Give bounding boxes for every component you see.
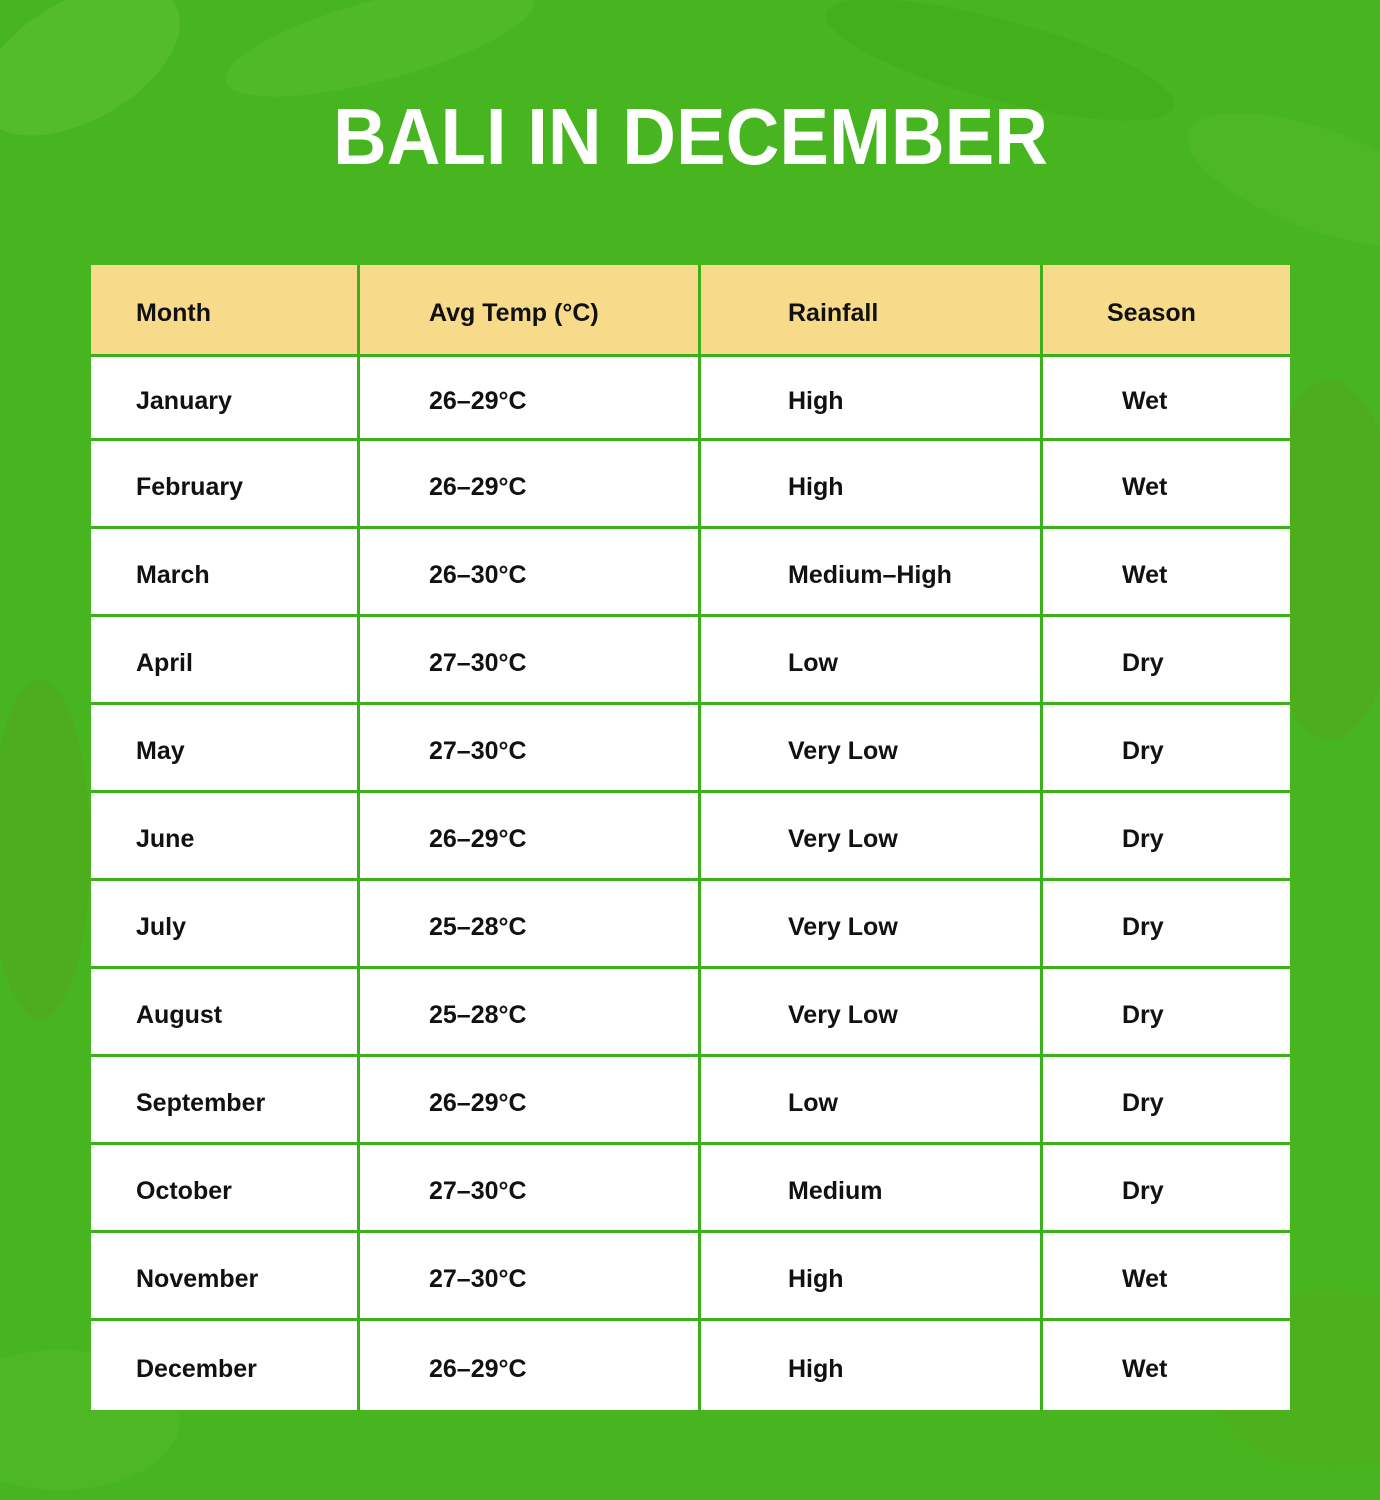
rows: Dry [1122,1001,1164,1029]
rows: November [136,1265,258,1293]
rows: Wet [1122,1265,1167,1293]
rows: Medium–High [788,561,952,589]
rows [91,357,1290,1410]
rows: Dry [1122,913,1164,941]
header row: Rainfall [788,299,878,327]
title: BALI IN DECEMBER [333,92,1048,181]
rows: February [136,473,243,501]
header row: Season [1107,299,1196,327]
rows: Dry [1122,737,1164,765]
rows: Wet [1122,387,1167,415]
rows: 26–29°C [429,825,527,853]
rows: December [136,1355,257,1383]
rows: August [136,1001,222,1029]
rows: 25–28°C [429,913,527,941]
rows: Wet [1122,561,1167,589]
rows: October [136,1177,232,1205]
rows: Dry [1122,825,1164,853]
rows: Very Low [788,737,898,765]
header row: Avg Temp (°C) [429,299,599,327]
rows: Very Low [788,1001,898,1029]
rows: Dry [1122,649,1164,677]
header row [91,265,1290,354]
rows: 25–28°C [429,1001,527,1029]
rows: 26–29°C [429,387,527,415]
rows: 27–30°C [429,1265,527,1293]
rows: March [136,561,210,589]
rows: June [136,825,194,853]
rows: July [136,913,186,941]
rows: Low [788,649,838,677]
rows: 27–30°C [429,649,527,677]
rows: 26–30°C [429,561,527,589]
rows: Dry [1122,1177,1164,1205]
rows: Very Low [788,825,898,853]
rows: 27–30°C [429,1177,527,1205]
rows: 27–30°C [429,737,527,765]
header row: Month [136,299,211,327]
rows: September [136,1089,265,1117]
rows: Dry [1122,1089,1164,1117]
rows: High [788,1355,844,1383]
rows: 26–29°C [429,1089,527,1117]
table [91,265,1290,1410]
rows: Medium [788,1177,882,1205]
rows: Wet [1122,1355,1167,1383]
rows: Very Low [788,913,898,941]
rows: May [136,737,185,765]
rows: High [788,387,844,415]
rows: January [136,387,232,415]
rows: 26–29°C [429,1355,527,1383]
rows: 26–29°C [429,473,527,501]
rows: High [788,1265,844,1293]
rows: High [788,473,844,501]
rows: April [136,649,193,677]
rows: Low [788,1089,838,1117]
rows: Wet [1122,473,1167,501]
